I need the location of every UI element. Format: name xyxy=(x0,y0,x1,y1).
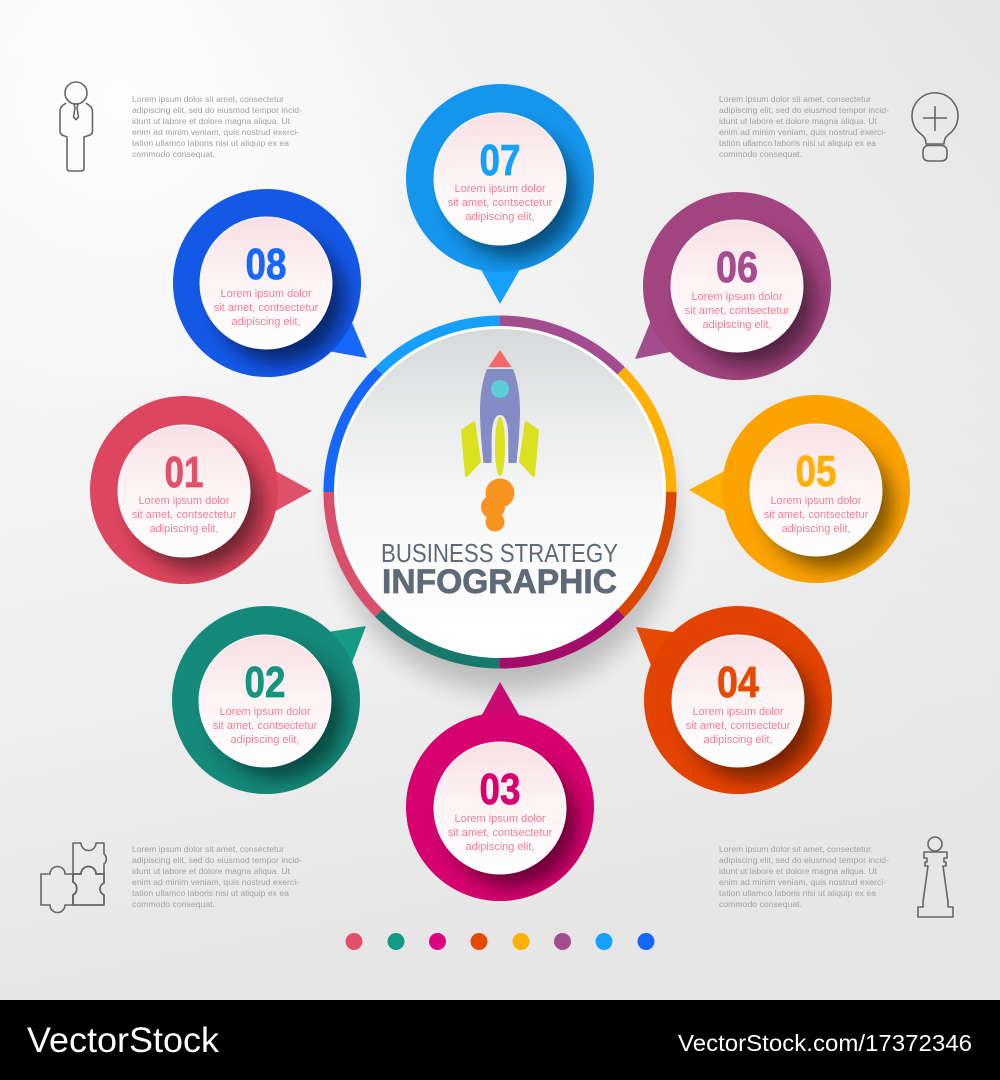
bubble 08 xyxy=(173,189,367,377)
bubble 01: Lorem ipsum dolor xyxy=(138,495,230,507)
bubble 08: Lorem ipsum dolor xyxy=(220,288,312,300)
bubble 04 xyxy=(636,606,832,794)
icon: light bulb xyxy=(912,93,958,161)
ring segment 02 xyxy=(380,612,500,662)
text block: top left: adipiscing elit, sed do eiusmod tempor incid- xyxy=(132,105,302,115)
text block: top right xyxy=(719,94,889,159)
bubble 06 xyxy=(635,192,831,380)
bubble 02: sit amet, contsectetur xyxy=(213,720,318,732)
title xyxy=(381,540,618,601)
rocket flame xyxy=(481,478,514,532)
ring segment 08 xyxy=(330,372,380,492)
bubble 07: 07 xyxy=(480,136,520,185)
text block: bottom right: Lorem ipsum dolor sit amet, consectetur xyxy=(719,844,871,854)
bubble 05: 05 xyxy=(796,447,836,496)
bubble 02: adipiscing elit, xyxy=(230,734,300,746)
colour legend dots xyxy=(346,933,654,950)
icon: rocket xyxy=(461,350,539,532)
bubble 03: Lorem ipsum dolor xyxy=(454,813,546,825)
rocket nose xyxy=(488,350,512,367)
footer logo: VectorStock xyxy=(27,1021,220,1060)
text block: bottom right: tation ullamco laboris nisi ut aliquip ex ea xyxy=(719,888,876,898)
bubble 01: adipiscing elit, xyxy=(149,523,219,535)
bubble 02 xyxy=(172,606,366,794)
bubble 08: adipiscing elit, xyxy=(231,316,301,328)
rocket window xyxy=(491,380,509,398)
ring segment 03 xyxy=(500,612,620,662)
bubble 05: sit amet, contsectetur xyxy=(764,509,869,521)
bubble 05: Lorem ipsum dolor xyxy=(770,495,862,507)
rocket centre fin xyxy=(495,417,505,476)
text block: top left: tation ullamco laboris nisi ut aliquip ex ea xyxy=(132,138,289,148)
title: BUSINESS STRATEGY xyxy=(381,540,618,568)
text block: bottom left: enim ad minim veniam, quis nostrud exerci- xyxy=(132,877,299,887)
text block: bottom left xyxy=(132,844,302,909)
bubble 01: sit amet, contsectetur xyxy=(132,509,237,521)
ring segment 07 xyxy=(380,322,500,372)
text block: top right: idunt ut labore et dolore magna aliqua. Ut xyxy=(719,116,878,126)
text block: top left xyxy=(132,94,302,159)
bubble 07 xyxy=(406,84,594,304)
bubble 04: sit amet, contsectetur xyxy=(686,720,791,732)
bubble 06: 06 xyxy=(716,243,758,292)
bubble 03: 03 xyxy=(480,765,520,814)
icon: businessman xyxy=(60,82,92,171)
bubble 01 xyxy=(90,396,312,584)
bubble 03: adipiscing elit, xyxy=(465,841,535,853)
bubble 07: Lorem ipsum dolor xyxy=(454,183,546,195)
ring segment 01 xyxy=(330,492,380,612)
text block: top right: adipiscing elit, sed do eiusmod tempor incid- xyxy=(719,105,889,115)
bubble 08: 08 xyxy=(246,240,286,289)
text block: bottom left: tation ullamco laboris nisi ut aliquip ex ea xyxy=(132,888,289,898)
text block: bottom left: Lorem ipsum dolor sit amet, consectetur xyxy=(132,844,284,854)
icon: chess piece xyxy=(918,837,953,917)
text block: bottom right xyxy=(719,844,889,909)
bubble 07: adipiscing elit, xyxy=(465,211,535,223)
bubble 04: 04 xyxy=(717,658,759,707)
ring segment 06 xyxy=(500,322,620,372)
bubble 06: sit amet, contsectetur xyxy=(685,305,790,317)
bubble 08: sit amet, contsectetur xyxy=(214,302,319,314)
icon: puzzle pieces xyxy=(41,843,106,913)
bubble 04: adipiscing elit, xyxy=(703,734,773,746)
central disc drop shadow xyxy=(335,352,675,692)
text block: top left: idunt ut labore et dolore magna aliqua. Ut xyxy=(132,116,291,126)
bubble 02: 02 xyxy=(244,658,286,707)
rocket body xyxy=(480,369,520,463)
segmented ring xyxy=(330,322,670,662)
bubble 06: adipiscing elit, xyxy=(702,319,772,331)
bubble 06: Lorem ipsum dolor xyxy=(691,291,783,303)
central disc xyxy=(336,328,664,656)
text block: top left: Lorem ipsum dolor sit amet, consectetur xyxy=(132,94,284,104)
footer bar xyxy=(0,1000,1000,1080)
bubble 01: 01 xyxy=(164,448,204,497)
bubble 05: adipiscing elit, xyxy=(781,523,851,535)
text block: top left: enim ad minim veniam, quis nostrud exerci- xyxy=(132,127,299,137)
bubble 03 xyxy=(406,682,594,901)
text block: bottom right: enim ad minim veniam, quis nostrud exerci- xyxy=(719,877,886,887)
rocket wings xyxy=(461,421,539,477)
text block: bottom right: idunt ut labore et dolore magna aliqua. Ut xyxy=(719,866,878,876)
text block: bottom left: idunt ut labore et dolore magna aliqua. Ut xyxy=(132,866,291,876)
bubble 07: sit amet, contsectetur xyxy=(448,197,553,209)
text block: top right: commodo consequat. xyxy=(719,149,802,159)
ring segment 05 xyxy=(620,372,670,492)
text block: bottom left: commodo consequat. xyxy=(132,899,215,909)
bubble 03: sit amet, contsectetur xyxy=(448,827,553,839)
text block: bottom left: adipiscing elit, sed do eiusmod tempor incid- xyxy=(132,855,302,865)
title: INFOGRAPHIC xyxy=(382,563,617,601)
text block: top right: Lorem ipsum dolor sit amet, consectetur xyxy=(719,94,871,104)
ring segment 04 xyxy=(620,492,670,612)
text block: top left: commodo consequat. xyxy=(132,149,215,159)
bubble 04: Lorem ipsum dolor xyxy=(692,706,784,718)
text block: bottom right: commodo consequat. xyxy=(719,899,802,909)
bubble 05 xyxy=(689,395,910,583)
text block: top right: enim ad minim veniam, quis nostrud exerci- xyxy=(719,127,886,137)
bubble 02: Lorem ipsum dolor xyxy=(219,706,311,718)
text block: top right: tation ullamco laboris nisi ut aliquip ex ea xyxy=(719,138,876,148)
text block: bottom right: adipiscing elit, sed do eiusmod tempor incid- xyxy=(719,855,889,865)
footer image id: VectorStock.com/17372346 xyxy=(678,1030,972,1056)
